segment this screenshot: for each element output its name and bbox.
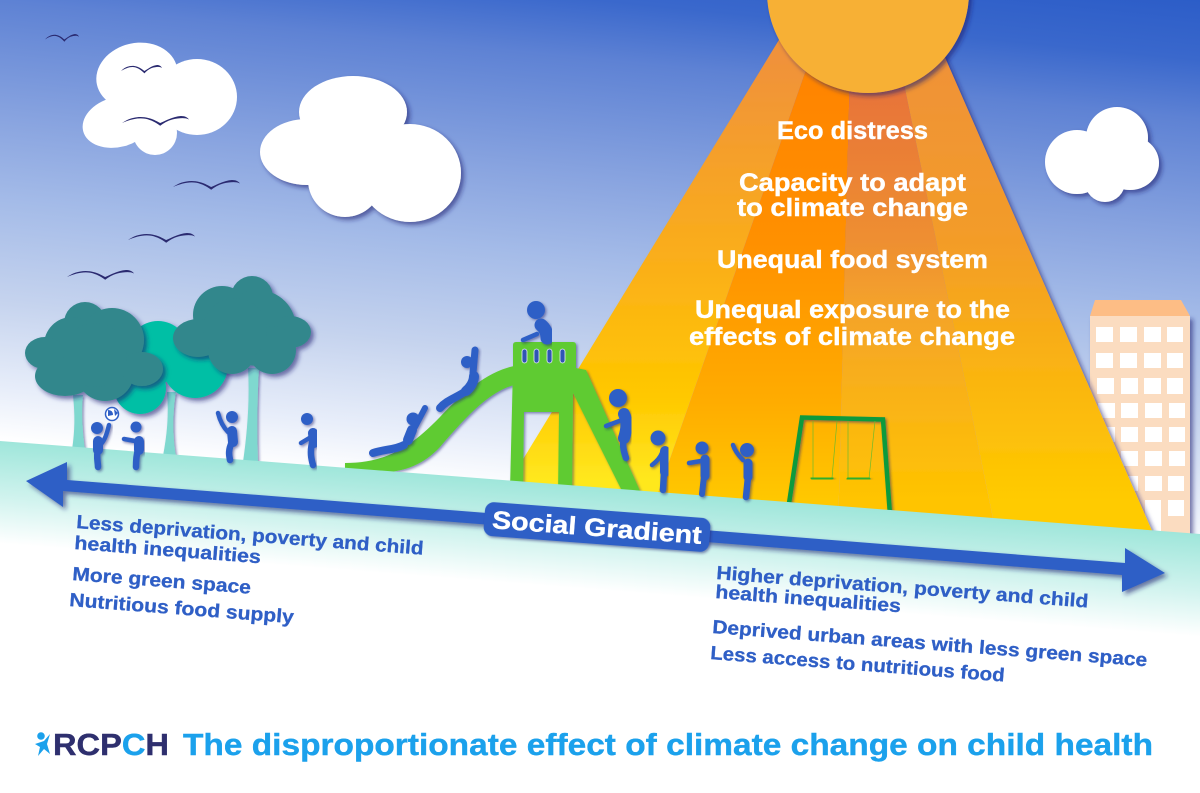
ground strip: [0, 441, 1200, 793]
RCPCH logo: RCPCH: [53, 727, 169, 762]
children: [91, 301, 754, 497]
beam text: climate effects: Eco distress: [777, 117, 928, 145]
birds: [45, 34, 240, 280]
swing set: [788, 418, 890, 515]
text: more deprived side: Deprived urban areas with less green space: [712, 617, 1148, 671]
beam text: climate effects: to climate change: [737, 194, 968, 222]
text: more deprived side: Less access to nutritious food: [710, 643, 1005, 687]
beam text: climate effects: Capacity to adapt: [739, 169, 967, 197]
beam text: climate effects: Unequal food system: [717, 246, 988, 274]
text: less deprived side: [69, 512, 424, 628]
child climbing: [606, 389, 627, 458]
cloud: upper left: [77, 35, 237, 155]
child sliding lower: [373, 408, 425, 453]
cloud: centre: [260, 76, 461, 222]
text: more deprived side: health inequalities: [715, 582, 902, 617]
title: The disproportionate effect of climate change on child health: [183, 727, 1153, 762]
sun beam: [478, 30, 1153, 533]
beach ball: [106, 408, 118, 420]
beam text: climate effects: Unequal exposure to the: [695, 296, 1010, 324]
child walking: [301, 413, 314, 465]
beam text: climate effects: effects of climate change: [689, 323, 1015, 351]
slide tower windows: [522, 349, 565, 363]
sun: [767, 0, 969, 93]
icon: logo figure: [35, 732, 50, 756]
text: less deprived side: More green space: [72, 564, 252, 599]
playground slide: [345, 342, 640, 495]
text: less deprived side: Less deprivation, poverty and child: [76, 512, 424, 560]
building: [1090, 300, 1190, 540]
trees: [25, 276, 311, 462]
child queue 1: [650, 430, 666, 490]
child catching: [124, 422, 142, 467]
social gradient label: [483, 502, 711, 552]
child waving: [218, 411, 238, 460]
text: more deprived side: [710, 563, 1148, 687]
social gradient label: Social Gradient: [491, 506, 703, 550]
social gradient arrow: [26, 462, 1165, 592]
cloud: right: [1045, 107, 1159, 202]
child queue 2: [689, 442, 708, 494]
text: less deprived side: Nutritious food supply: [69, 590, 295, 628]
text: more deprived side: Higher deprivation, poverty and child: [716, 563, 1089, 613]
text: less deprived side: health inequalities: [74, 533, 262, 568]
child on tower: [523, 301, 547, 340]
child sliding upper: [440, 350, 475, 408]
beam text: climate effects: [689, 117, 1015, 351]
child queue 3: [733, 443, 754, 497]
child with raised arm and ball: [91, 422, 109, 467]
